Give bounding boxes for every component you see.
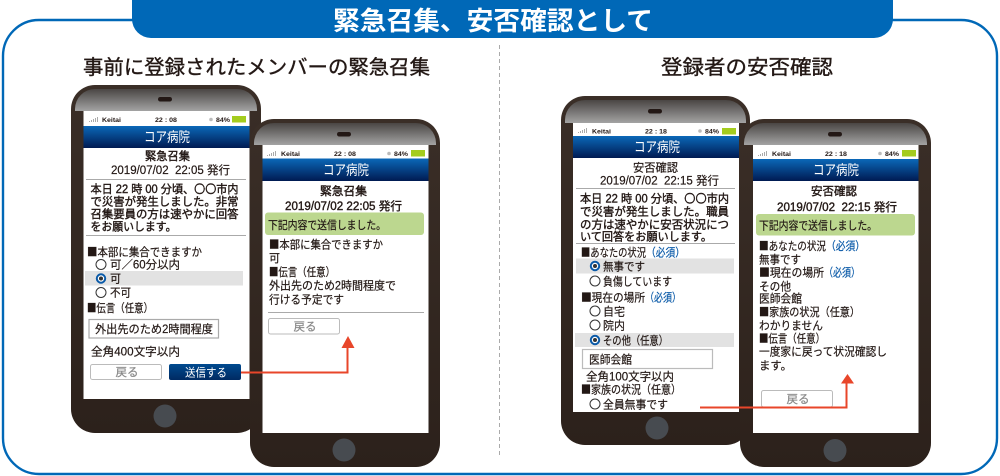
message title [111,149,230,177]
status bar: 84% [216,117,230,124]
status bar: 84% [705,128,719,136]
submitted answers: 行ける予定です [269,294,344,306]
message input: 全角400文字以内 [91,344,180,358]
submitted answers: （必須） [826,239,865,253]
green confirmation notice: 下記内容で送信しました。 [759,218,877,232]
panel: phone 1 emergency call form [71,85,261,433]
message body: をお願いします。 [90,220,176,234]
question: your status: ■あなたの状況 [581,244,646,260]
question: current location: 医師会館 [589,354,632,366]
title banner [132,0,893,38]
question: current location: 院内 [603,318,625,332]
message body: 本日 22 時 00 分頃、〇〇市内 [580,192,729,206]
status bar [267,150,425,158]
status bar: Keitai [281,151,300,158]
back button: 戻る [786,394,810,406]
green confirmation notice: 下記内容で送信しました。 [268,218,386,232]
phone body [250,119,440,467]
status bar: 22 : 18 [825,151,847,158]
question: your status: 負傷しています [603,274,672,288]
message body: 召集要員の方は速やかに回答 [90,207,239,221]
message title [777,184,897,214]
back button [268,318,340,334]
status bar [758,150,916,158]
message body: 本日 22 時 00 分頃、〇〇市内 [90,182,238,196]
status bar [89,116,246,124]
question: assemble: 可／60分以内 [110,258,180,272]
status bar: 84% [394,151,408,158]
message input [87,300,218,358]
app header [573,136,739,158]
submitted answers: ■伝言（任意） [269,264,335,280]
arrow: answer to confirmation [700,374,854,408]
question: current location: ■現在の場所 [581,290,645,306]
question: assemble: ■本部に集合できますか [87,244,202,260]
back button [90,364,162,380]
status bar: Keitai [772,151,791,158]
phone body [71,85,261,433]
submitted answers: ■伝言（任意） [759,330,825,346]
heading: left section: 事前に登録されたメンバーの緊急召集 [83,56,430,79]
title banner: 緊急召集、安否確認として [333,6,653,36]
question: your status: （必須） [646,246,685,260]
message input: ■伝言（任意） [87,300,153,316]
message title: 2019/07/02 22:15 発行 [600,174,719,188]
message input: 外出先のため2時間程度 [95,323,213,336]
message title: 2019/07/02 22:05 発行 [111,163,230,177]
arrow: send to confirmation [241,336,354,372]
question: current location: その他（任意） [603,334,668,348]
status bar: Keitai [592,128,611,136]
green confirmation notice [265,212,424,235]
status bar: 22 : 18 [645,128,667,136]
heading: right section: 登録者の安否確認 [661,56,833,79]
status bar: 22 : 08 [334,151,356,158]
back button [762,390,832,407]
back button: 戻る [116,367,138,379]
app header [753,159,918,181]
question: current location [575,290,734,384]
message body: の方は速やかに安否状況につ [580,218,729,232]
message body [580,192,729,244]
message body [90,182,239,234]
question: assemble: 可 [110,274,121,286]
message title [285,184,402,213]
question: family status [581,382,681,412]
submitted answers: ■現在の場所 [759,264,824,280]
question: family status: ■家族の状況（任意） [581,382,681,398]
submitted answers: 外出先のため2時間程度で [269,280,396,292]
status bar [578,128,736,136]
app header [84,126,250,148]
phone body [740,119,931,467]
question: your status: 無事です [603,260,645,274]
message body: いて回答をお願いします。 [580,230,712,244]
send button [169,364,241,380]
panel: phone 2 send confirmation [250,119,440,467]
app header: コア病院 [634,139,680,155]
phone body [561,96,750,445]
back button: 戻る [294,322,316,334]
submitted answers [759,238,887,372]
submitted answers: わかりません [759,320,823,332]
question: current location: 全角100文字以内 [586,370,674,384]
app header [262,158,428,181]
submitted answers: 医師会館 [759,292,802,306]
send button: 送信する [185,366,227,380]
question: current location: 自宅 [603,306,625,318]
app header: コア病院 [813,162,859,178]
message body: で災害が発生しました。職員 [580,204,729,218]
message title: 安否確認 [633,160,678,174]
submitted answers: ■本部に集合できますか [269,236,383,252]
message title [600,160,719,188]
question: your status [576,244,734,288]
status bar: 22 : 08 [155,117,177,124]
message title: 安否確認 [811,184,857,198]
green confirmation notice [756,214,915,236]
app header: コア病院 [144,129,190,145]
question: assemble [85,244,243,300]
submitted answers [269,236,396,306]
submitted answers: 一度家に戻って状況確認し [759,344,887,358]
message title: 2019/07/02 22:05 発行 [285,199,402,213]
submitted answers: その他 [759,280,791,294]
submitted answers: ■あなたの状況 [759,238,826,254]
question: current location: （必須） [645,290,681,304]
submitted answers: ます。 [759,360,792,372]
status bar: Keitai [102,117,121,124]
panel: phone 3 safety check form [561,96,750,445]
message title: 緊急召集 [145,149,190,163]
app header: コア病院 [323,162,369,178]
message body: で災害が発生しました。非常 [90,194,238,208]
submitted answers: （必須） [824,266,860,280]
submitted answers: 無事です [759,252,801,266]
panel: phone 4 safety confirmation [740,119,931,467]
question: family status: 全員無事です [603,398,668,412]
submitted answers: 可 [269,253,280,265]
status bar: 84% [885,151,899,158]
submitted answers: ■家族の状況（任意） [759,304,860,320]
message title: 2019/07/02 22:15 発行 [777,200,897,214]
message title: 緊急召集 [320,184,368,198]
question: assemble: 不可 [110,288,131,300]
